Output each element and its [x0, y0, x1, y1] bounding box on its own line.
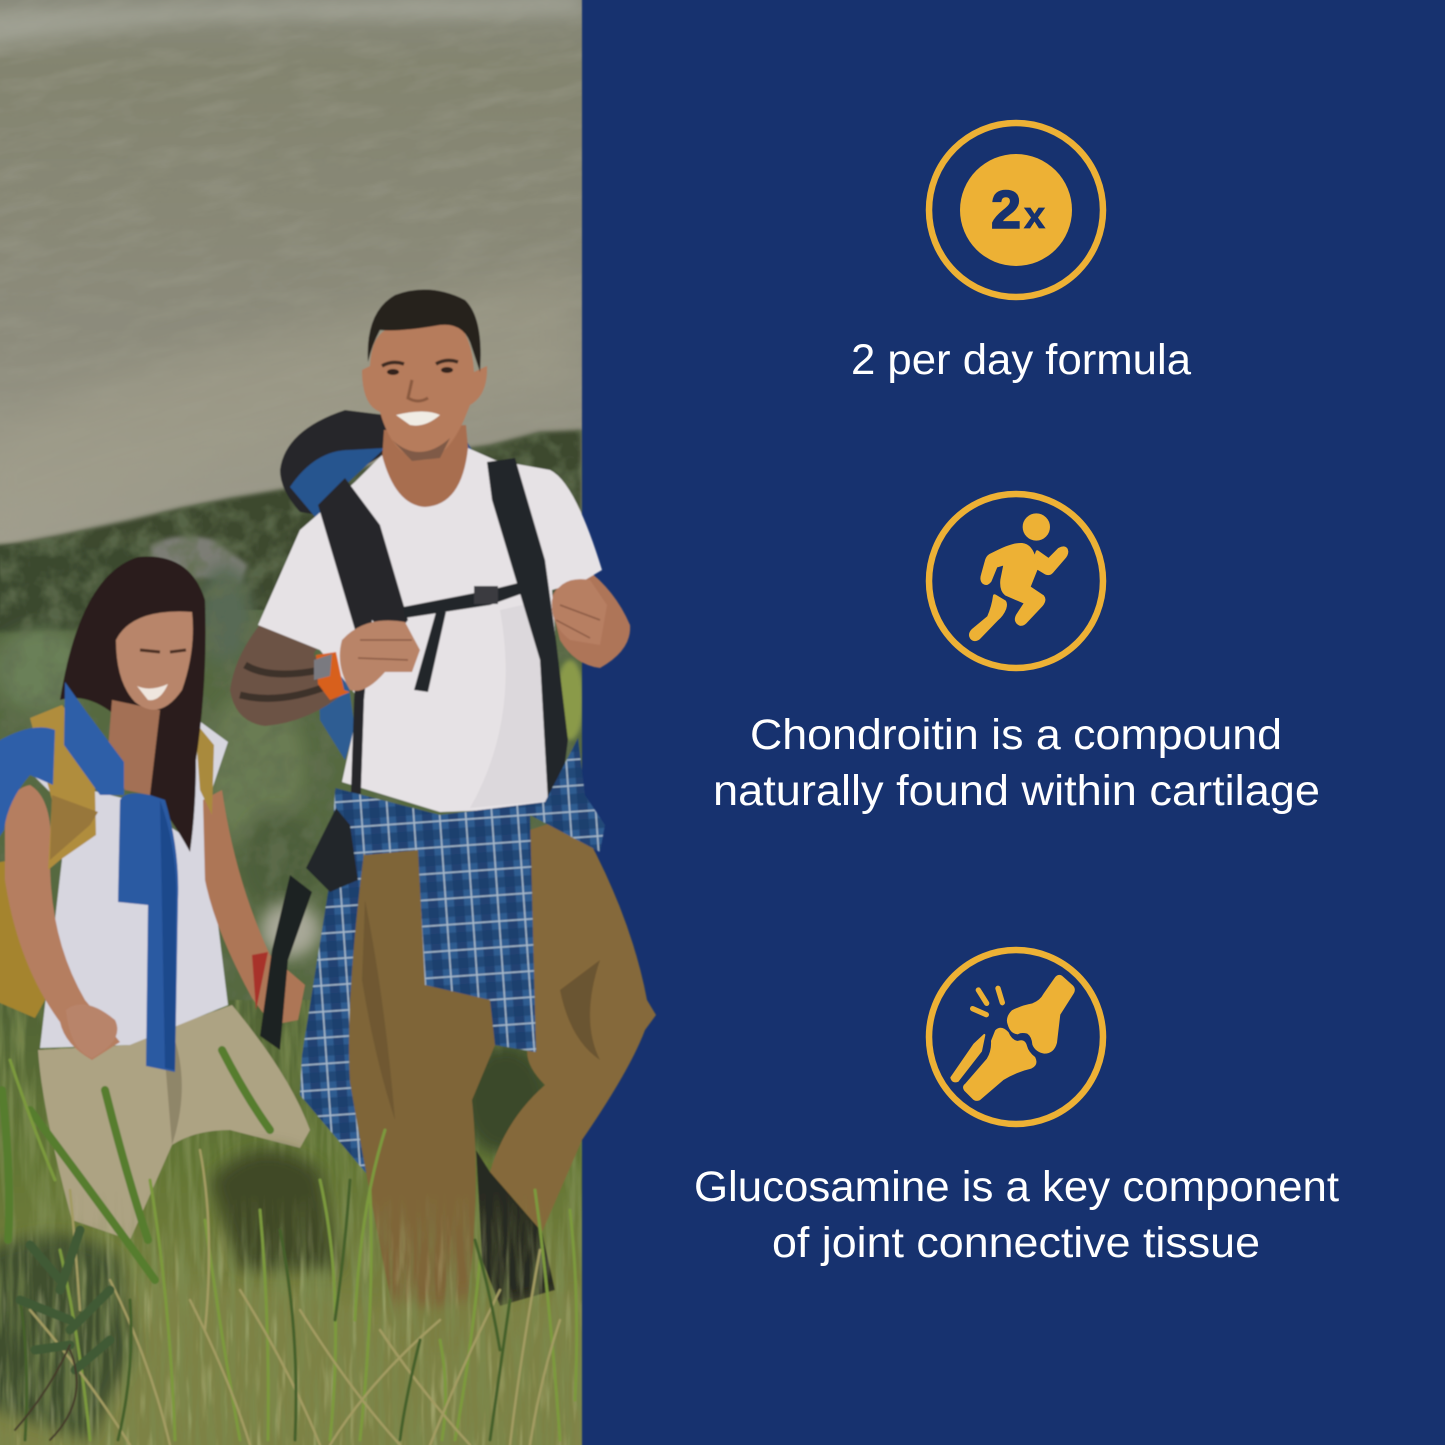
figure: man hiker: [230, 290, 656, 1320]
icon: knee joint: [929, 950, 1103, 1124]
man tattooed arm: [230, 622, 345, 726]
man backpack top: [280, 410, 392, 515]
grass blades: [2, 1050, 577, 1445]
icon: 2x dosage badge: [929, 123, 1103, 297]
man plaid shirt left panel: [300, 790, 372, 1180]
text: glucosamine description: Glucosamine is a key component: [694, 1163, 1339, 1211]
feature: chondroitin: [713, 494, 1320, 815]
woman backpack: [0, 860, 50, 1018]
text: 2 per day formula: 2 per day formula: [851, 336, 1191, 384]
feature: glucosamine: [694, 950, 1339, 1267]
feature: 2 per day formula: [851, 123, 1191, 384]
man boot: [476, 1150, 555, 1306]
man watch: [316, 652, 350, 700]
man hands: [340, 579, 607, 691]
man plaid shirt tied at waist: [335, 738, 605, 1052]
woman blue sweater: [64, 682, 124, 795]
woman shirt: [28, 720, 228, 1048]
man right forearm: [550, 568, 630, 668]
text: chondroitin description: naturally found within cartilage: [713, 767, 1320, 815]
woman neck and face: [108, 700, 160, 795]
text: glucosamine description: [694, 1163, 1339, 1267]
icon: 2x dosage badge: x: [1024, 195, 1045, 237]
man backpack straps: [318, 458, 568, 820]
man head: [362, 322, 487, 460]
man hair: [368, 290, 481, 372]
foreground grass: [0, 1050, 582, 1445]
text: chondroitin description: [713, 711, 1320, 815]
text: chondroitin description: Chondroitin is a compound: [750, 711, 1282, 759]
photo: hikers walking through grass on a hillside: [0, 0, 720, 1445]
photo background: hillside, shrubs and grass: [0, 0, 583, 1445]
text: glucosamine description: of joint connective tissue: [772, 1219, 1260, 1267]
figure: woman hiker: [0, 557, 310, 1240]
icon: running figure: [929, 494, 1103, 668]
woman backpack straps: [30, 705, 96, 870]
man neck: [382, 425, 470, 508]
man shoulder strap and buckle: [260, 808, 358, 1050]
man brown trousers: [349, 815, 656, 1320]
icon: 2x dosage badge: 2: [991, 180, 1021, 240]
woman trousers: [38, 1005, 310, 1240]
woman hair: [60, 557, 206, 852]
man white t-shirt: [258, 448, 602, 812]
grass mass covering legs: [0, 1287, 582, 1445]
shrub leaves: [20, 1230, 110, 1370]
woman right arm: [203, 790, 305, 1025]
woman left arm: [5, 785, 120, 1060]
